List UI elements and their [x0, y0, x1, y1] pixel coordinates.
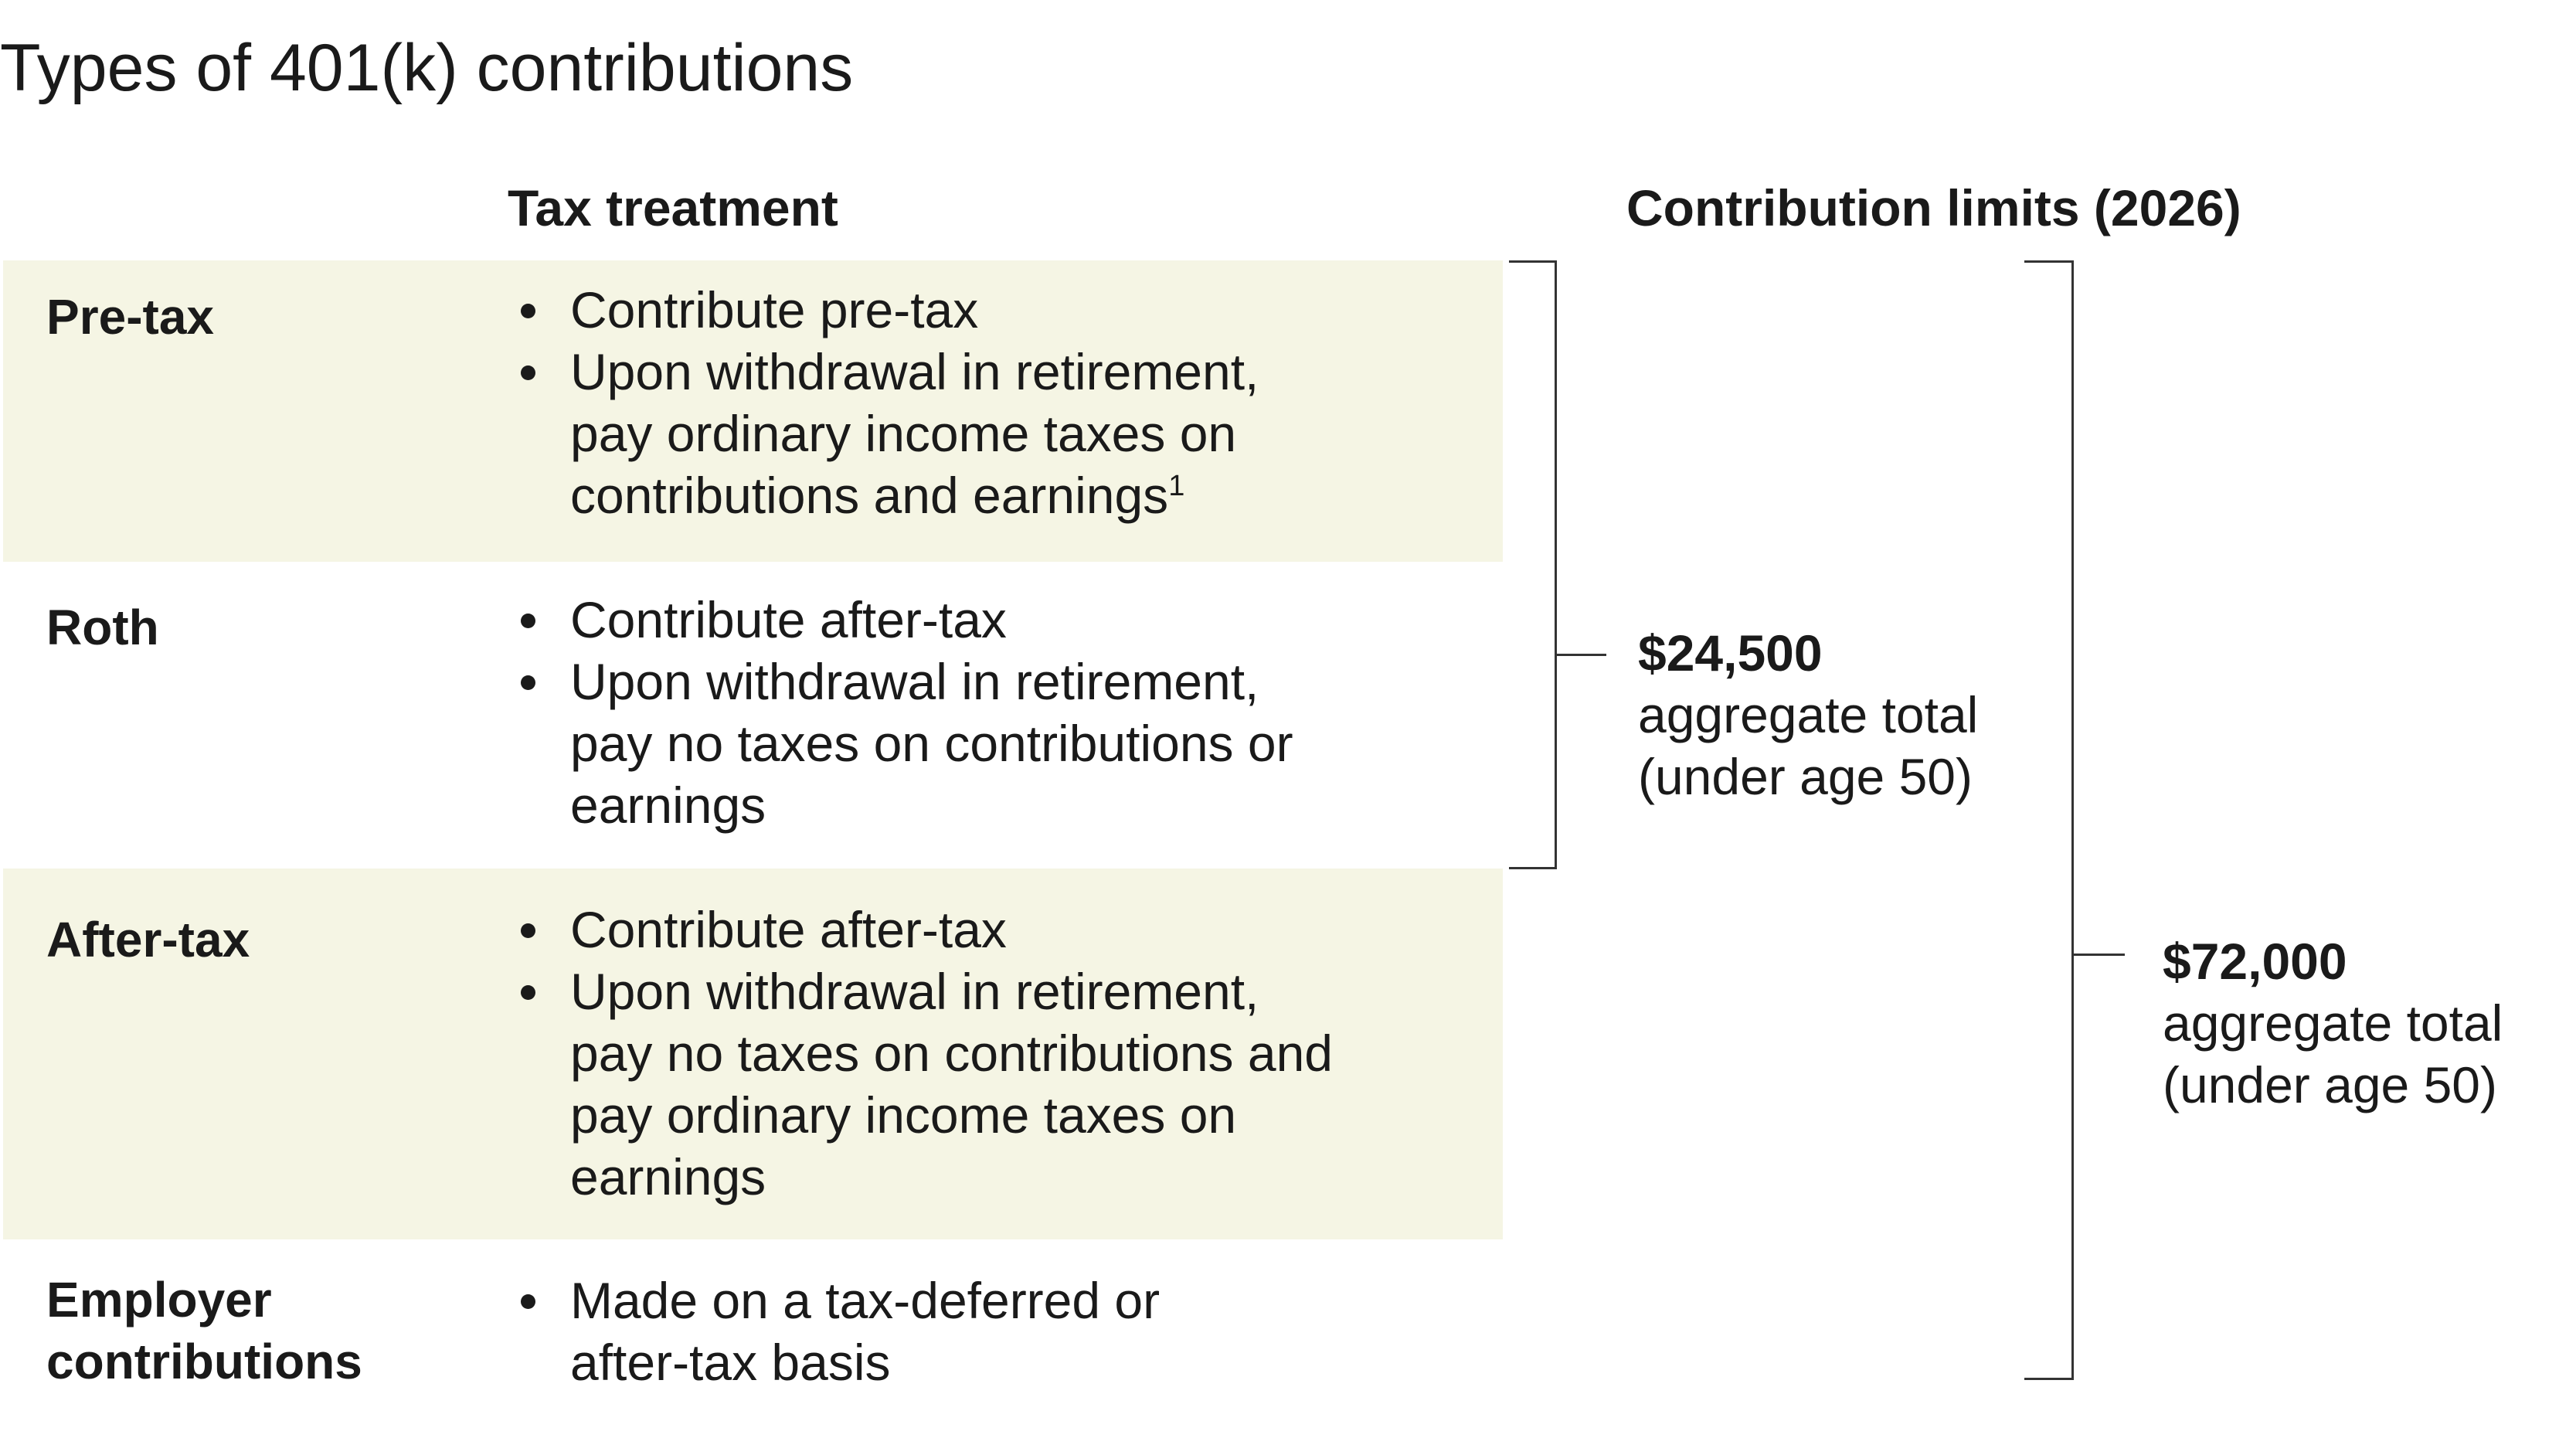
limit: 24,500: [1638, 624, 1978, 805]
limit: 24,500: $24,500: [1638, 624, 1823, 682]
text: roth treatment: Contribute after-tax: [570, 591, 1007, 648]
limit: 72,000: $72,000: [2163, 933, 2347, 990]
text: employer treatment: after-tax basis: [570, 1334, 890, 1391]
text: pre-tax treatment: pay ordinary income taxes on: [570, 405, 1236, 462]
text: employer treatment: Made on a tax-deferred or: [570, 1272, 1160, 1329]
text: after-tax treatment: pay ordinary income taxes on: [570, 1086, 1236, 1144]
text: roth treatment: Upon withdrawal in retirement,: [570, 653, 1259, 710]
limit: 24,500: aggregate total: [1638, 686, 1978, 743]
heading: contribution limits: Contribution limits (2026): [1626, 179, 2241, 236]
limit: 24,500: (under age 50): [1638, 748, 1973, 805]
text: after-tax treatment: Upon withdrawal in retirement,: [570, 963, 1259, 1020]
panel: after-tax: [3, 869, 1503, 1239]
text: roth treatment: earnings: [570, 777, 766, 834]
text: after-tax treatment: earnings: [570, 1148, 766, 1205]
limit: 72,000: [2163, 933, 2503, 1113]
label: employer contributions: [46, 1272, 362, 1389]
heading: tax treatment: Tax treatment: [508, 179, 838, 236]
label: roth: Roth: [46, 600, 159, 655]
label: employer contributions: Employer: [46, 1272, 272, 1328]
bracket: 72,000: [2024, 260, 2125, 1380]
panel: pre-tax: [3, 260, 1503, 562]
title: Types of 401(k) contributions: [0, 31, 853, 105]
text: pre-tax treatment: Contribute pre-tax: [570, 281, 978, 338]
text: pre-tax treatment: [521, 281, 1259, 524]
text: roth treatment: [521, 591, 1293, 834]
bracket: 24,500: [1509, 260, 1606, 869]
text: after-tax treatment: [521, 901, 1333, 1205]
text: after-tax treatment: Contribute after-tax: [570, 901, 1007, 958]
label: pre-tax: Pre-tax: [46, 289, 214, 345]
text: roth treatment: pay no taxes on contributions or: [570, 715, 1293, 772]
label: after-tax: After-tax: [46, 912, 250, 967]
text: pre-tax treatment: contributions and earnings1: [570, 467, 1184, 524]
limit: 72,000: aggregate total: [2163, 994, 2503, 1052]
text: employer treatment: [521, 1272, 1160, 1391]
label: employer contributions: contributions: [46, 1334, 362, 1389]
limit: 72,000: (under age 50): [2163, 1056, 2497, 1113]
text: pre-tax treatment: Upon withdrawal in retirement,: [570, 343, 1259, 400]
text: after-tax treatment: pay no taxes on contributions and: [570, 1025, 1333, 1082]
